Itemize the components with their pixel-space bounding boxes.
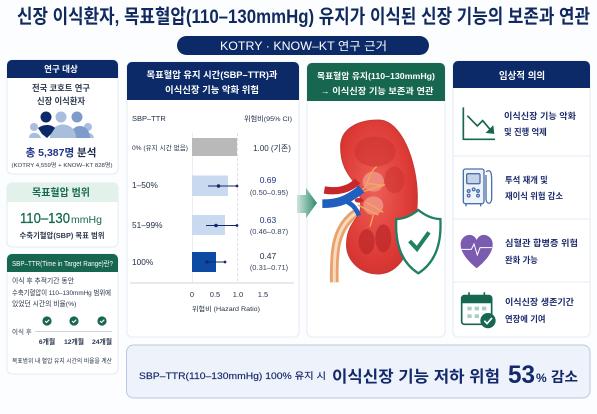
panel: clinical significance: 투석 재개 및 — [505, 175, 548, 185]
panel: clinical significance: 및 진행 억제 — [504, 127, 547, 137]
panel: target BP range: 110–130 — [20, 210, 70, 227]
timeline: 24개월 — [92, 337, 112, 346]
hazard ratio values: (0.50–0.95) — [250, 188, 289, 197]
row labels: 1–50% — [132, 180, 158, 190]
panel: kidney preservation: → 이식신장 기능 보존과 연관 — [320, 86, 434, 96]
callout: key result: 이식신장 기능 저하 위험 — [332, 368, 500, 386]
panel: clinical significance: 완화 가능 — [505, 255, 538, 265]
panel: clinical significance — [453, 61, 590, 337]
panel: hazard ratio chart: 이식신장 기능 악화 위험 — [165, 84, 259, 95]
icon: declining chart — [463, 107, 495, 139]
icon: green shield with check — [396, 210, 441, 273]
bar chart — [130, 133, 294, 313]
hazard ratio values: 1.00 (기존) — [253, 144, 291, 153]
icon: kidney illustration — [322, 120, 417, 282]
panel: clinical significance: 임상적 의의 — [499, 70, 545, 82]
bar chart: 1.0 — [233, 290, 243, 299]
bar chart: 1.5 — [258, 290, 268, 299]
panel: hazard ratio chart: 위험비(95% CI) — [244, 114, 292, 123]
icon: dialysis machine — [463, 169, 492, 206]
panel: SBP-TTR definition: SBP–TTR(Time in Target Range)란? — [12, 260, 113, 268]
subtitle pill — [177, 36, 429, 55]
bar chart: 위험비 (Hazard Ratio) — [192, 304, 260, 313]
icon: patient group — [29, 112, 94, 138]
panel: clinical significance: 심혈관 합병증 위험 — [505, 238, 578, 248]
panel: clinical significance: 이식신장 기능 악화 — [504, 111, 576, 121]
panel: SBP-TTR definition: 이식 후 추적기간 동안 — [12, 276, 74, 285]
panel: target BP range: 목표혈압 범위 — [32, 186, 90, 199]
timeline — [12, 316, 112, 346]
panel: clinical significance: 연장에 기여 — [505, 314, 545, 324]
panel: target BP range — [7, 183, 118, 247]
panel: SBP-TTR definition: 목표범위 내 혈압 유지 시간의 비율을 계산 — [12, 357, 112, 365]
hazard ratio values: 0.69 — [260, 175, 277, 185]
panel: hazard ratio chart: SBP–TTR — [132, 114, 166, 123]
bar chart: 0.5 — [210, 290, 220, 299]
panel: SBP-TTR definition: 수축기혈압이 110–130mmHg 범위에 — [12, 288, 111, 297]
panel: study population: 신장 이식환자 — [37, 96, 85, 106]
panel: hazard ratio chart — [127, 62, 299, 337]
timeline: 6개월 — [39, 337, 55, 346]
callout: key result: % — [536, 371, 547, 385]
hazard ratio values: (0.46–0.87) — [250, 227, 289, 236]
timeline: 이식 후 — [12, 327, 32, 336]
panel: hazard ratio chart: 목표혈압 유지 시간(SBP–TTR)과 — [146, 69, 278, 80]
panel: clinical significance: 이식신장 생존기간 — [505, 297, 574, 307]
bar chart: 0 — [190, 290, 194, 299]
panel: kidney preservation: 목표혈압 유지(110–130mmHg) — [317, 71, 435, 81]
callout: key result: 감소 — [551, 369, 578, 385]
panel: SBP-TTR definition — [7, 254, 118, 374]
subtitle pill: KOTRY · KNOW–KT 연구 근거 — [220, 40, 387, 53]
hazard ratio values: (0.31–0.71) — [250, 263, 289, 272]
panel: study population: (KOTRY 4,559명 + KNOW–KT 828명) — [12, 162, 113, 169]
hazard ratio values: 0.63 — [260, 215, 277, 225]
panel: study population — [7, 60, 118, 174]
callout: key result: 53 — [508, 361, 535, 389]
row labels: 100% — [132, 257, 154, 267]
panel: study population: 전국 코호트 연구 — [32, 83, 90, 93]
icon: calendar with check — [462, 292, 496, 328]
callout: key result — [126, 345, 590, 398]
panel: target BP range: 수축기혈압(SBP) 목표 범위 — [20, 230, 105, 240]
panel: kidney preservation — [307, 63, 445, 337]
hazard ratio values — [250, 144, 291, 272]
hazard ratio values: 0.47 — [260, 251, 277, 261]
panel: target BP range: mmHg — [71, 214, 102, 226]
panel: clinical significance: 재이식 위험 감소 — [505, 191, 563, 201]
row labels: 0% (유지 시간 없음) — [132, 143, 188, 152]
icon: purple heart with pulse — [461, 235, 493, 268]
panel: study population: 총 5,387명 분석 — [26, 146, 96, 159]
timeline: 12개월 — [64, 337, 84, 346]
panel: SBP-TTR definition: 있었던 시간의 비율(%) — [12, 299, 76, 308]
arrow — [297, 188, 317, 218]
callout: key result: SBP–TTR(110–130mmHg) 100% 유지 시 — [139, 371, 326, 381]
row labels: 51–99% — [132, 220, 163, 230]
row labels — [132, 143, 188, 267]
panel: study population: 연구 대상 — [44, 64, 78, 74]
